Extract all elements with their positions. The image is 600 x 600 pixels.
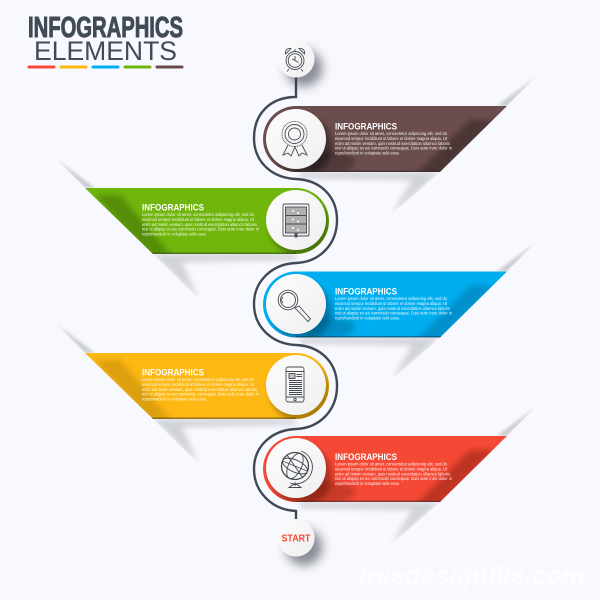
text: infographics: Lorem ipsum dolor sit amet, consectetur adipiscing elit, sed do <box>335 296 447 301</box>
icon: award ribbon <box>282 122 307 156</box>
text: infographics: eiusmod tempor incididunt ut labore et dolore magna aliqua. Ut <box>335 466 448 471</box>
step 3 panel: blue <box>263 242 536 380</box>
text: start: START <box>282 534 310 544</box>
text: infographics: INFOGRAPHICS <box>142 368 204 378</box>
text: infographics <box>335 122 452 156</box>
text: infographics: nisi ut aliquip ex ea commodo consequat. Duis aute irure dolor in <box>335 476 452 481</box>
text: infographics: enim ad minim veniam, quis nostrud exercitation ullamco laboris <box>335 471 451 476</box>
text: infographics: reprehenderit in voluptate velit esse. <box>142 397 207 402</box>
text: infographics: INFOGRAPHICS <box>142 202 204 212</box>
subtitle: elements: ELEMENTS <box>34 36 177 66</box>
text: infographics: reprehenderit in voluptate velit esse. <box>142 232 207 237</box>
step 2 panel: yellow <box>56 324 330 463</box>
timeline connector path <box>254 76 337 519</box>
text: infographics: INFOGRAPHICS <box>335 286 397 296</box>
text: infographics: enim ad minim veniam, quis nostrud exercitation ullamco laboris <box>335 141 451 146</box>
text: infographics: enim ad minim veniam, quis nostrud exercitation ullamco laboris <box>335 306 451 311</box>
colour legend dashes <box>29 66 182 68</box>
text: infographics <box>142 202 259 237</box>
watermark: freedesignfile.com <box>358 562 585 590</box>
title block <box>28 12 183 67</box>
text: infographics <box>335 286 452 321</box>
title: infographics: INFOGRAPHICS <box>28 12 183 44</box>
text: infographics: nisi ut aliquip ex ea commodo consequat. Duis aute irure dolor in <box>142 392 259 397</box>
text: infographics: eiusmod tempor incididunt ut labore et dolore magna aliqua. Ut <box>142 382 255 387</box>
text: infographics: reprehenderit in voluptate velit esse. <box>335 151 400 156</box>
text: infographics: nisi ut aliquip ex ea commodo consequat. Duis aute irure dolor in <box>142 227 259 232</box>
icon: alarm clock <box>285 48 305 72</box>
icon: globe <box>280 451 312 488</box>
text: infographics: reprehenderit in voluptate velit esse. <box>335 481 400 486</box>
text: infographics: Lorem ipsum dolor sit amet, consectetur adipiscing elit, sed do <box>142 212 254 217</box>
text: infographics: INFOGRAPHICS <box>335 452 397 462</box>
end node: alarm clock <box>278 40 314 78</box>
text: infographics: eiusmod tempor incididunt ut labore et dolore magna aliqua. Ut <box>335 136 448 141</box>
text: infographics: reprehenderit in voluptate velit esse. <box>335 316 400 321</box>
text: infographics <box>335 452 452 486</box>
text: infographics: Lorem ipsum dolor sit amet, consectetur adipiscing elit, sed do <box>335 131 447 136</box>
text: infographics: enim ad minim veniam, quis nostrud exercitation ullamco laboris <box>142 387 258 392</box>
step 5 panel: brown <box>263 77 536 214</box>
text: infographics: eiusmod tempor incididunt ut labore et dolore magna aliqua. Ut <box>142 217 255 222</box>
text: infographics <box>142 368 259 402</box>
icon: magnifying glass <box>278 290 310 322</box>
step 1 panel: red <box>263 407 536 544</box>
text: infographics: nisi ut aliquip ex ea commodo consequat. Duis aute irure dolor in <box>335 146 452 151</box>
icon: smartphone <box>286 367 304 402</box>
text: infographics: nisi ut aliquip ex ea commodo consequat. Duis aute irure dolor in <box>335 311 452 316</box>
text: infographics: Lorem ipsum dolor sit amet, consectetur adipiscing elit, sed do <box>142 377 254 382</box>
step 4 panel: green <box>56 159 330 298</box>
text: infographics: eiusmod tempor incididunt ut labore et dolore magna aliqua. Ut <box>335 301 448 306</box>
start node <box>278 520 314 556</box>
icon: tablet list <box>283 204 309 237</box>
text: infographics: INFOGRAPHICS <box>335 122 397 132</box>
text: infographics: enim ad minim veniam, quis nostrud exercitation ullamco laboris <box>142 222 258 227</box>
text: infographics: Lorem ipsum dolor sit amet, consectetur adipiscing elit, sed do <box>335 462 447 466</box>
